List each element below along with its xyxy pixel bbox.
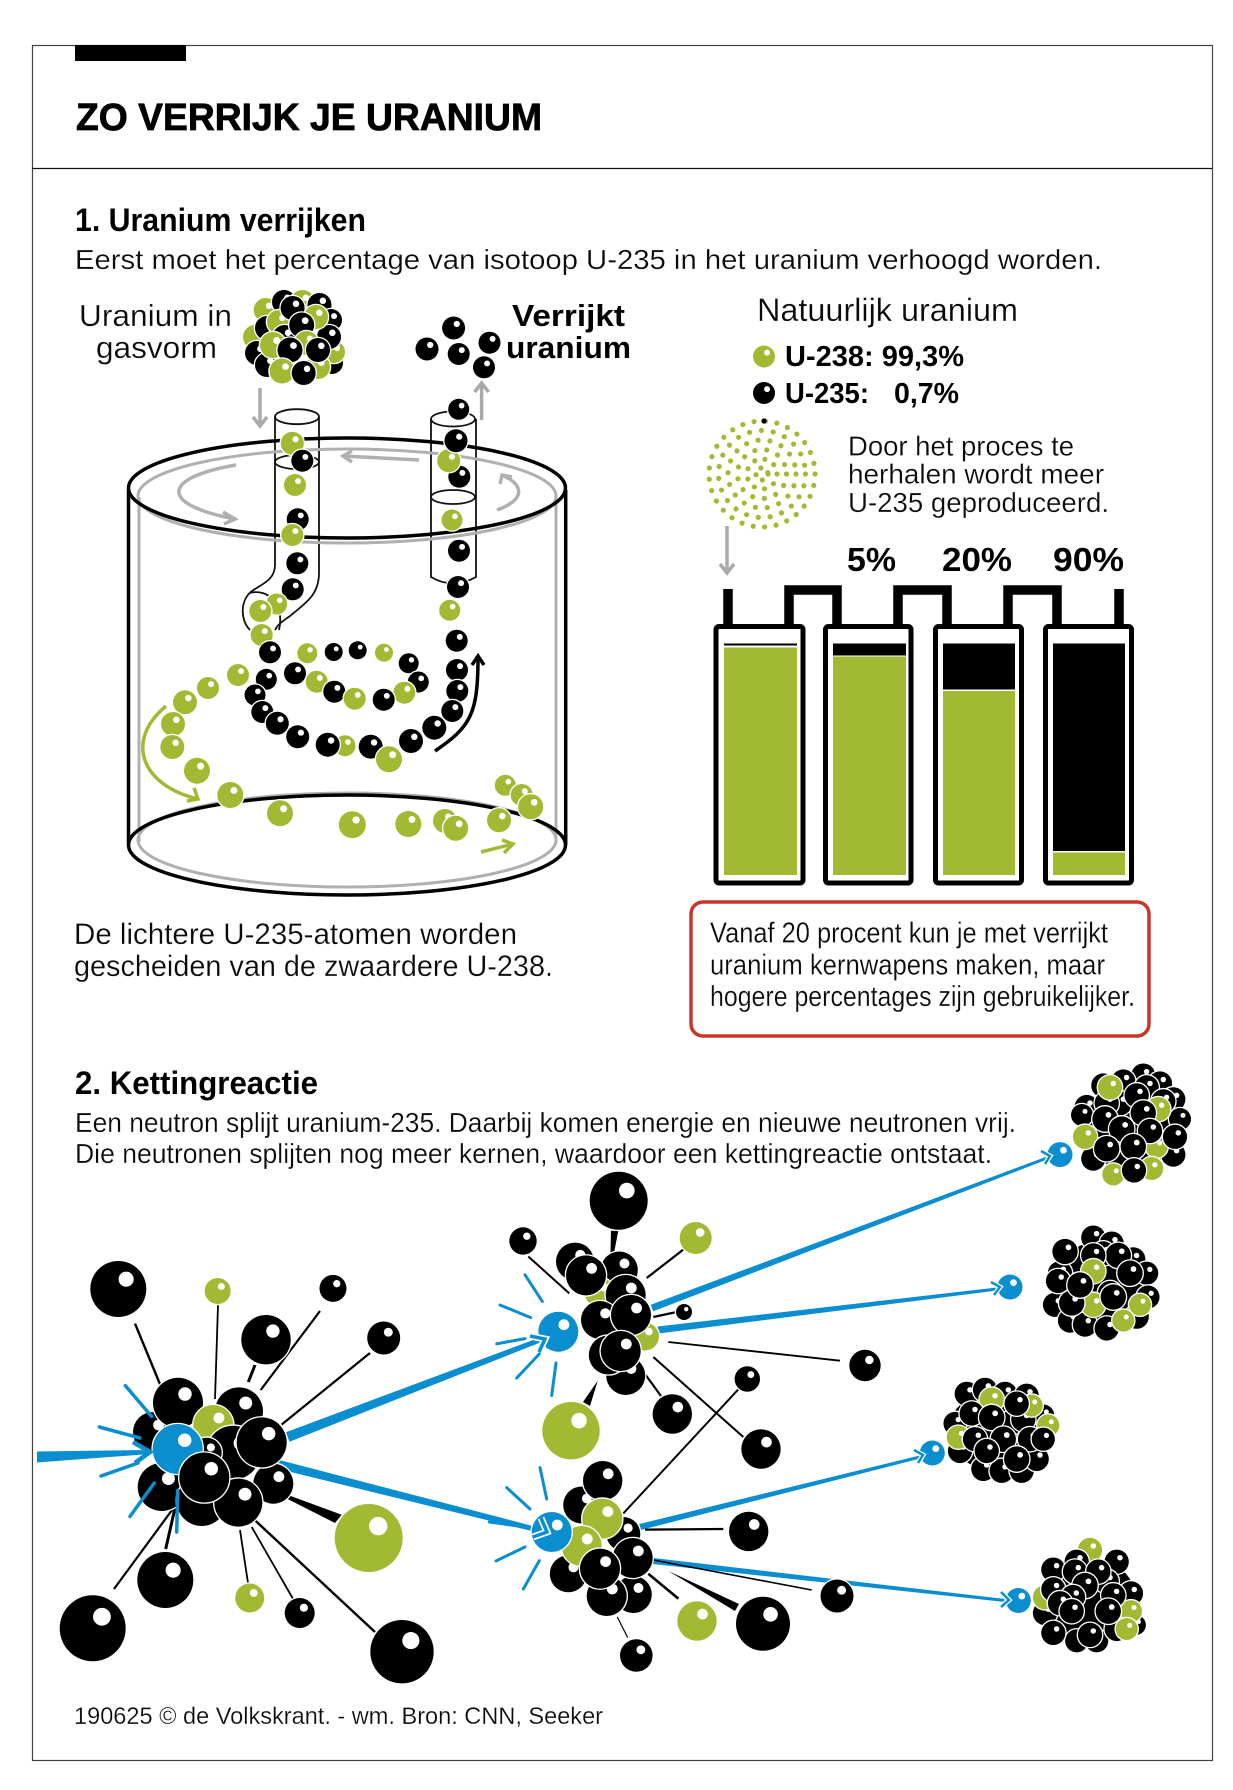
caption: separation (74, 918, 553, 983)
icon: gas cluster (243, 290, 345, 385)
percent labels (847, 541, 1124, 578)
panel: kettingreactie (37, 1064, 1191, 1683)
right tube (431, 412, 476, 584)
percent labels: 90% (1053, 541, 1124, 578)
vessel: 20 percent (936, 626, 1022, 883)
arrow: swirl right (497, 475, 519, 510)
arrow: enriched out (475, 383, 489, 420)
left tube (243, 409, 319, 630)
caption: separation: gescheiden van de zwaardere U-238. (74, 950, 553, 983)
first fission cluster (60, 1261, 434, 1683)
legend: isotopes: U-238: 99,3% (785, 341, 964, 373)
intro text: Een neutron splijt uranium-235. Daarbij komen energie en nieuwe neutronen vrij. (75, 1107, 1016, 1138)
label: verrijkt uranium: uranium (506, 330, 631, 365)
panel: uranium verrijken (74, 202, 1149, 1036)
chart: enrichment cascade (716, 589, 1132, 883)
atom cluster 3 (943, 1378, 1059, 1483)
caption: separation: De lichtere U-235-atomen worden (74, 918, 517, 951)
callout: weapons grade: hogere percentages zijn gebruikelijker. (710, 981, 1135, 1013)
label: verrijkt uranium (506, 298, 631, 365)
icon: dot circle of natural uranium (709, 418, 815, 527)
label: uranium in gasvorm (79, 298, 232, 365)
arrow: light U-235 up (435, 656, 484, 751)
neutrons at the right (914, 1142, 1072, 1613)
intro text: Eerst moet het percentage van isotoop U-235 in het uranium verhoogd worden. (75, 244, 1102, 275)
vessel: 90 percent (1046, 626, 1132, 883)
pipes (728, 589, 1119, 628)
text: repeating the process: herhalen wordt meer (848, 458, 1104, 490)
second fission cluster lower (489, 1461, 854, 1672)
percent labels: 5% (847, 541, 896, 578)
percent labels: 20% (942, 541, 1012, 578)
heading: section 2: 2. Kettingreactie (75, 1065, 318, 1101)
label: uranium in gasvorm: gasvorm (96, 330, 217, 365)
legend: isotopes: 0,7% (894, 378, 959, 410)
atom cluster 1 (1071, 1064, 1191, 1185)
label: verrijkt uranium: Verrijkt (512, 298, 625, 333)
vessel: 5 percent (826, 626, 911, 883)
icon: enriched atoms (416, 316, 500, 378)
atoms in tank (160, 399, 543, 841)
callout: weapons grade (691, 902, 1149, 1036)
legend: isotopes: U-235: (785, 378, 869, 410)
neutron paths (37, 1157, 1048, 1602)
atom cluster 2 (1043, 1226, 1160, 1341)
callout: weapons grade: uranium kernwapens maken, maar (710, 950, 1105, 982)
arrow: heavy U-238 down (143, 706, 198, 801)
callout: weapons grade: Vanaf 20 procent kun je met verrijkt (710, 918, 1108, 950)
text: repeating the process: U-235 geproduceerd. (848, 487, 1109, 518)
arrow: swirl middle (343, 451, 419, 462)
text: repeating the process (848, 430, 1109, 518)
label: uranium in gasvorm: Uranium in (79, 298, 232, 333)
intro text: Die neutronen splijten nog meer kernen, waardoor een kettingreactie ontstaat. (75, 1138, 992, 1169)
title: ZO VERRIJK JE URANIUM (76, 97, 542, 139)
atom cluster 4 (1033, 1538, 1146, 1652)
centrifuge tank (128, 399, 566, 895)
footer credit: 190625 © de Volkskrant. - wm. Bron: CNN, Seeker (74, 1703, 603, 1730)
arrow: gas in (253, 388, 267, 426)
legend: isotopes (753, 341, 964, 410)
arrow: swirl left (179, 465, 236, 524)
header tab (75, 45, 186, 61)
heading: section 1: 1. Uranium verrijken (75, 202, 366, 238)
arrow: green along bottom (481, 840, 513, 853)
intro text (75, 1107, 1016, 1169)
heading: natuurlijk uranium: Natuurlijk uranium (757, 292, 1018, 328)
second fission cluster upper (497, 1172, 881, 1513)
arrow: into cascade (720, 526, 734, 573)
vessel: natural (716, 626, 803, 883)
text: repeating the process: Door het proces te (848, 430, 1074, 462)
